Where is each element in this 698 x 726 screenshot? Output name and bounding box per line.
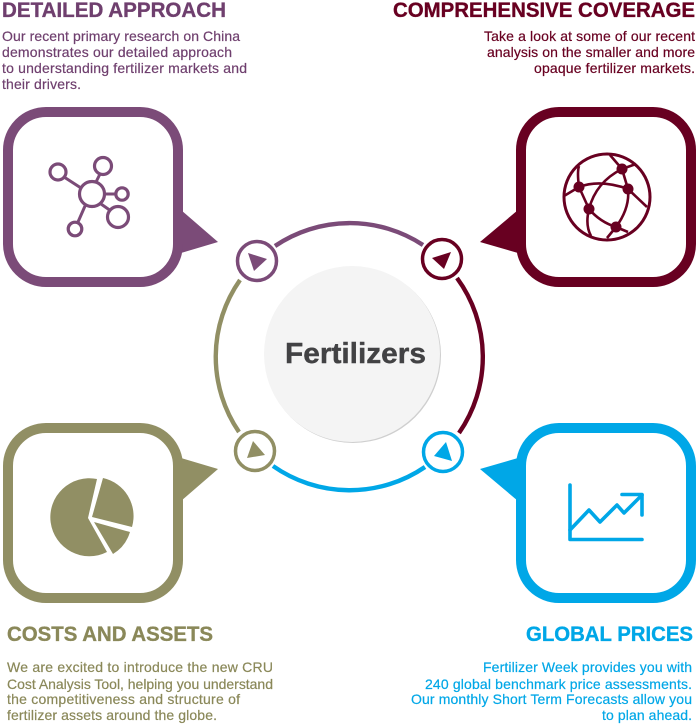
panel: global prices text — [411, 623, 693, 723]
text block: costs and assets body: We are excited to introduce the new CRU — [7, 659, 273, 675]
text block: costs and assets body: fertilizer assets around the globe. — [7, 707, 217, 723]
arc: blue — [273, 466, 425, 490]
text block: costs and assets body: the competitiveness and structure of — [7, 691, 240, 707]
text block: detailed approach body: demonstrates our detailed approach — [2, 44, 232, 60]
text block: global prices body — [411, 659, 692, 723]
icon: line chart — [570, 485, 642, 540]
title: fertilizers: Fertilizers — [285, 338, 426, 370]
text block: costs and assets body: Cost Analysis Tool, helping you understand — [7, 676, 273, 692]
text block: costs and assets body — [7, 659, 273, 723]
text block: global prices body: Our monthly Short Term Forecasts allow you — [411, 691, 692, 707]
text block: comprehensive coverage body — [484, 28, 695, 76]
text block: global prices body: 240 global benchmark price assessments. — [425, 676, 692, 692]
panel: costs and assets text — [7, 623, 273, 723]
icon: pie chart — [50, 478, 134, 556]
center circle: fertilizers — [264, 266, 441, 443]
text block: comprehensive coverage body: opaque fertilizer markets. — [534, 60, 695, 76]
arc: maroon — [457, 278, 483, 433]
node: purple arrow — [238, 242, 276, 280]
node: maroon arrow — [422, 240, 462, 278]
text block: global prices body: Fertilizer Week provides you with — [483, 659, 692, 675]
node: olive arrow — [236, 432, 274, 470]
panel: comprehensive coverage text — [393, 0, 695, 76]
text block: detailed approach body: their drivers. — [2, 76, 81, 92]
text block: comprehensive coverage body: Take a look at some of our recent — [484, 28, 695, 44]
arc: purple — [275, 223, 423, 246]
text block: detailed approach body — [2, 28, 247, 92]
panel: detailed approach text — [2, 0, 247, 92]
node: blue arrow — [424, 432, 462, 472]
panel: costs and assets speech bubble — [8, 428, 218, 598]
text block: global prices body: to plan ahead. — [602, 707, 692, 723]
text block: detailed approach body: to understanding fertilizer markets and — [2, 60, 247, 76]
icon: globe — [564, 154, 650, 240]
text block: comprehensive coverage body: analysis on the smaller and more — [487, 44, 695, 60]
heading: global prices: GLOBAL PRICES — [526, 623, 693, 646]
text block: detailed approach body: Our recent primary research on China — [2, 28, 240, 44]
icon: network — [50, 158, 128, 236]
panel: comprehensive coverage speech bubble — [480, 112, 691, 282]
heading: costs and assets: COSTS AND ASSETS — [7, 623, 213, 646]
panel: global prices speech bubble — [480, 428, 691, 598]
arc: olive — [216, 280, 240, 432]
panel: detailed approach speech bubble — [8, 112, 218, 282]
diagram: central ring — [216, 223, 483, 490]
